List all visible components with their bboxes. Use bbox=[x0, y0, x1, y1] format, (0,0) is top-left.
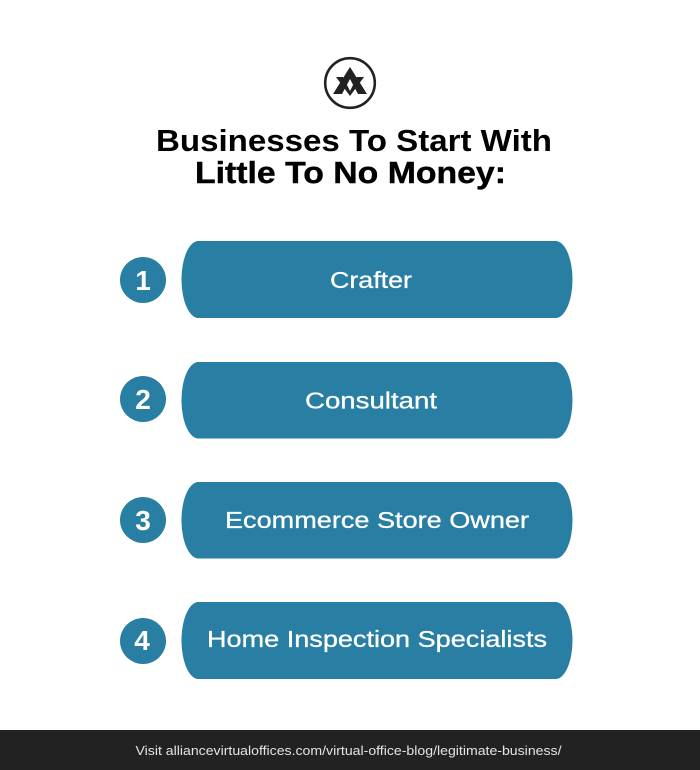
number badge 4 bbox=[120, 618, 166, 664]
list item 4 bbox=[120, 602, 572, 679]
footer bar: Visit alliancevirtualoffices.com/virtual-office-blog/legitimate-business/ bbox=[136, 743, 562, 758]
number badge 2: 2 bbox=[135, 384, 151, 415]
pill: Ecommerce Store Owner bbox=[182, 482, 572, 558]
pill: Consultant bbox=[182, 362, 572, 438]
list item 2 bbox=[120, 362, 572, 438]
number badge 3 bbox=[120, 497, 166, 543]
title: Businesses To Start With bbox=[156, 123, 552, 158]
number badge 2 bbox=[120, 376, 166, 422]
number badge 3: 3 bbox=[135, 505, 151, 536]
pill: Home Inspection Specialists: Home Inspection Specialists bbox=[207, 626, 547, 652]
number badge 1 bbox=[120, 257, 166, 303]
number badge 4: 4 bbox=[134, 625, 150, 656]
pill: Crafter: Crafter bbox=[330, 267, 412, 293]
title: Little To No Money: bbox=[195, 155, 506, 190]
list item 1 bbox=[120, 241, 572, 318]
pill: Crafter bbox=[182, 241, 572, 318]
pill: Home Inspection Specialists bbox=[182, 602, 572, 679]
icon: logo bbox=[325, 58, 375, 108]
title bbox=[156, 123, 552, 190]
pill: Consultant: Consultant bbox=[305, 388, 438, 414]
footer bar bbox=[0, 730, 700, 770]
pill: Ecommerce Store Owner: Ecommerce Store Owner bbox=[225, 507, 529, 533]
number badge 1: 1 bbox=[135, 265, 151, 296]
list item 3 bbox=[120, 482, 572, 558]
